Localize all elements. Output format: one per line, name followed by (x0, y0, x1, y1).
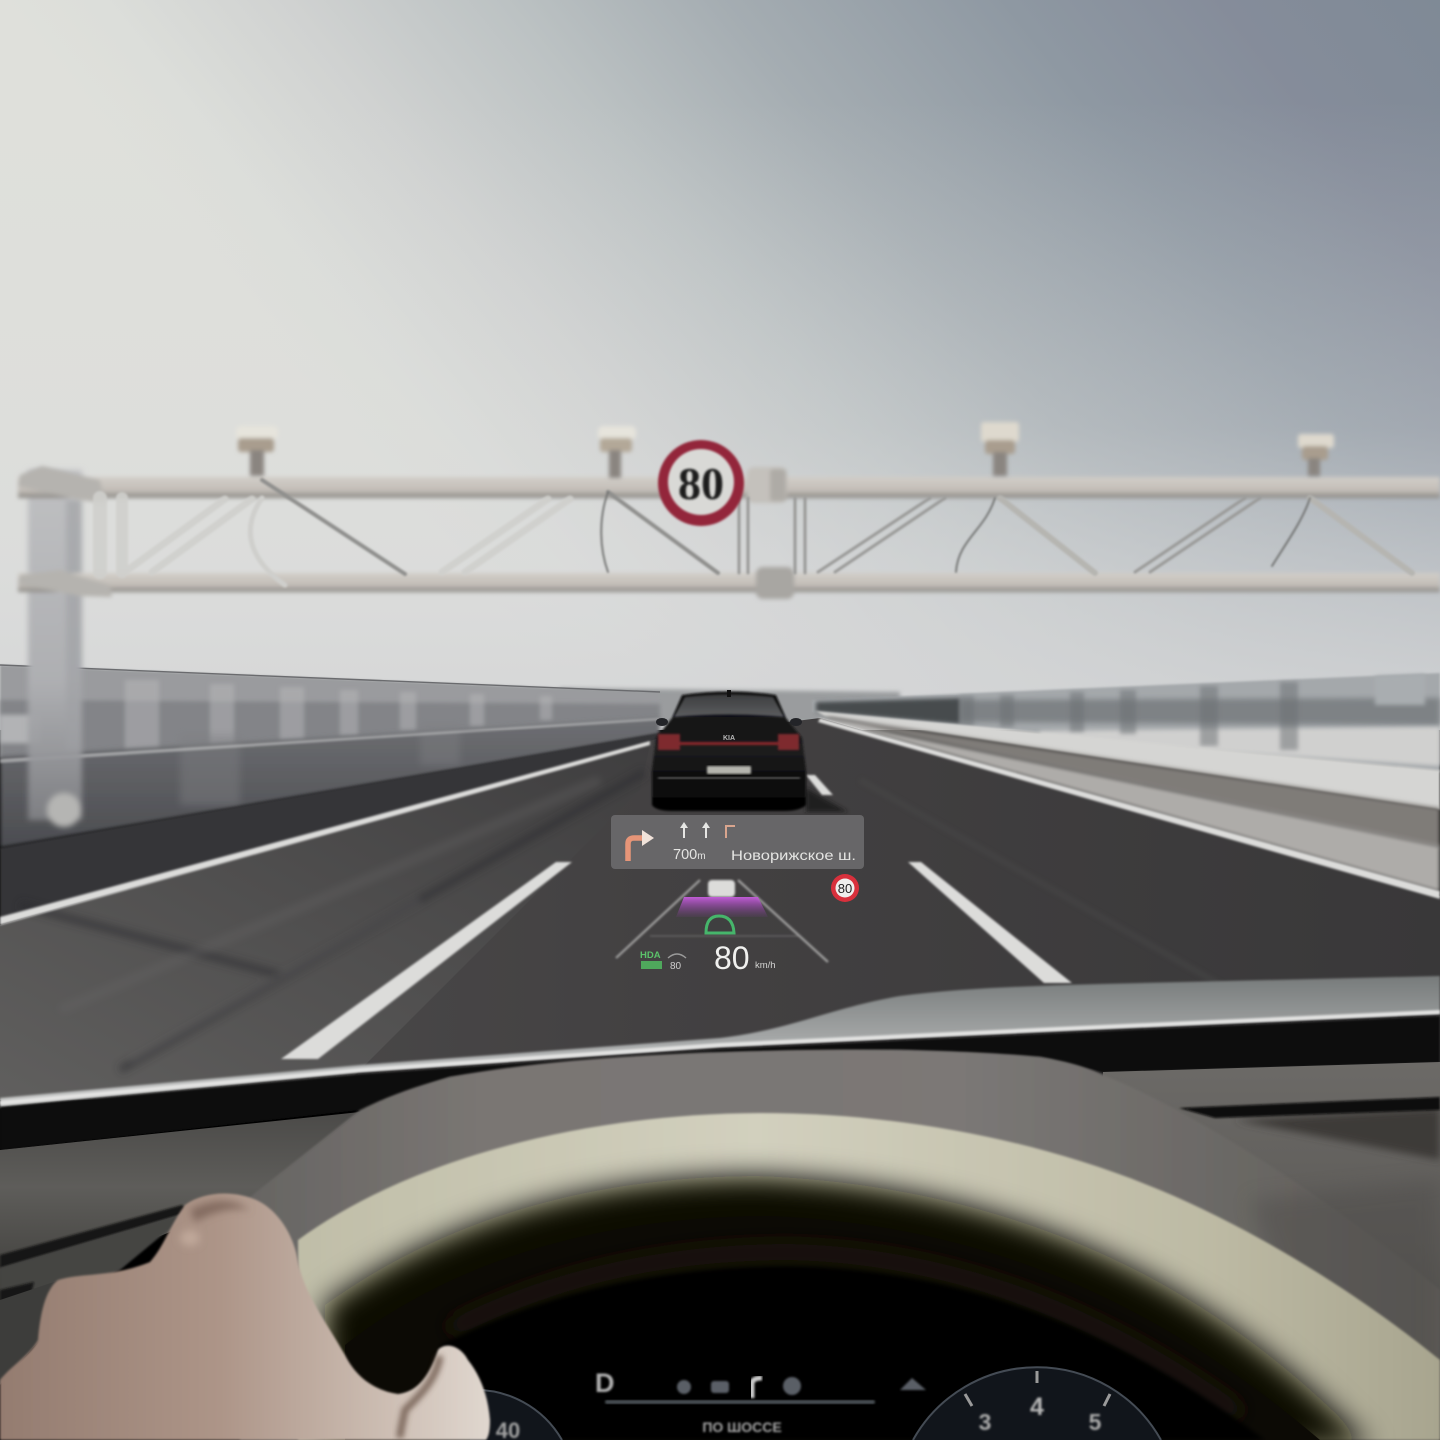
gantry post (28, 470, 82, 827)
right tachometer dial: 5 (1089, 1409, 1102, 1435)
cluster status icons (677, 1377, 926, 1395)
road name: Новорижское ш. (731, 847, 856, 863)
speed unit: km/h (755, 960, 776, 971)
tail lights (658, 734, 799, 750)
right tachometer dial (913, 1367, 1161, 1440)
driver's hand on wheel (0, 1193, 490, 1440)
overhead gantry (18, 422, 1440, 827)
gantry truss (100, 480, 1412, 585)
head-up display (611, 815, 864, 976)
steering wheel inner fill (345, 1216, 1320, 1440)
lane guide lines (616, 880, 828, 962)
car body (652, 692, 806, 811)
right dash surface (1100, 1062, 1440, 1440)
HDA indicator: HDA (640, 950, 661, 961)
left speedometer dial (470, 1390, 562, 1440)
navigation panel (611, 815, 864, 869)
right dash shadow wedge (1235, 1108, 1440, 1160)
HDA indicator: 80 (670, 961, 682, 972)
distance: 700m (673, 847, 706, 863)
left roadside barrier (0, 665, 660, 925)
number plate (707, 766, 751, 774)
dark cowl band (0, 1016, 1440, 1150)
knuckle shading (180, 1201, 250, 1246)
road surface (0, 718, 1440, 1100)
sky background (0, 0, 1440, 730)
dashboard (0, 976, 1440, 1440)
HUD speed limit icon: 80 (838, 881, 852, 896)
cluster turn arrow (752, 1378, 762, 1398)
thumb crease (400, 1356, 440, 1438)
side mirrors (656, 718, 802, 726)
strip highlight line (0, 1012, 1440, 1103)
speed limit sign 80 (658, 440, 744, 526)
gear indicator: D (595, 1368, 614, 1398)
lane arrows (680, 822, 735, 838)
left dash surface (0, 1112, 360, 1385)
speed limit sign 80: 80 (678, 458, 724, 509)
turn arrow (628, 838, 644, 861)
steering wheel rim (298, 1113, 1440, 1440)
right roadside barrier (812, 673, 1440, 892)
instrument cluster (440, 1266, 1265, 1440)
wheel stitching glow (450, 1252, 1240, 1415)
instrument binnacle (240, 1050, 1440, 1440)
binnacle right fade (1250, 1180, 1440, 1440)
current speed: 80 (714, 940, 750, 976)
right tachometer dial: 4 (1030, 1393, 1044, 1421)
cluster divider (605, 1400, 875, 1404)
road markings (0, 718, 1440, 1059)
distant horizon band (560, 688, 900, 725)
HUD speed limit icon (831, 874, 859, 902)
HUD own vehicle (706, 916, 734, 933)
gantry clamps (747, 467, 794, 599)
HUD distance band (676, 897, 768, 917)
right tachometer dial: 3 (979, 1409, 991, 1435)
HUD lead vehicle (708, 880, 735, 897)
cluster caption: ПО ШОССЕ (702, 1419, 782, 1435)
traffic cameras (236, 422, 1334, 478)
rear window (674, 694, 784, 717)
gantry beams (18, 466, 1440, 597)
car ahead (652, 690, 806, 811)
right dash vent slit (1179, 1097, 1440, 1118)
kia badge: KIA (723, 735, 735, 742)
HDA indicator (640, 950, 686, 972)
steering wheel inner shadow (325, 1176, 1370, 1440)
windshield base silver strip (0, 976, 1440, 1108)
